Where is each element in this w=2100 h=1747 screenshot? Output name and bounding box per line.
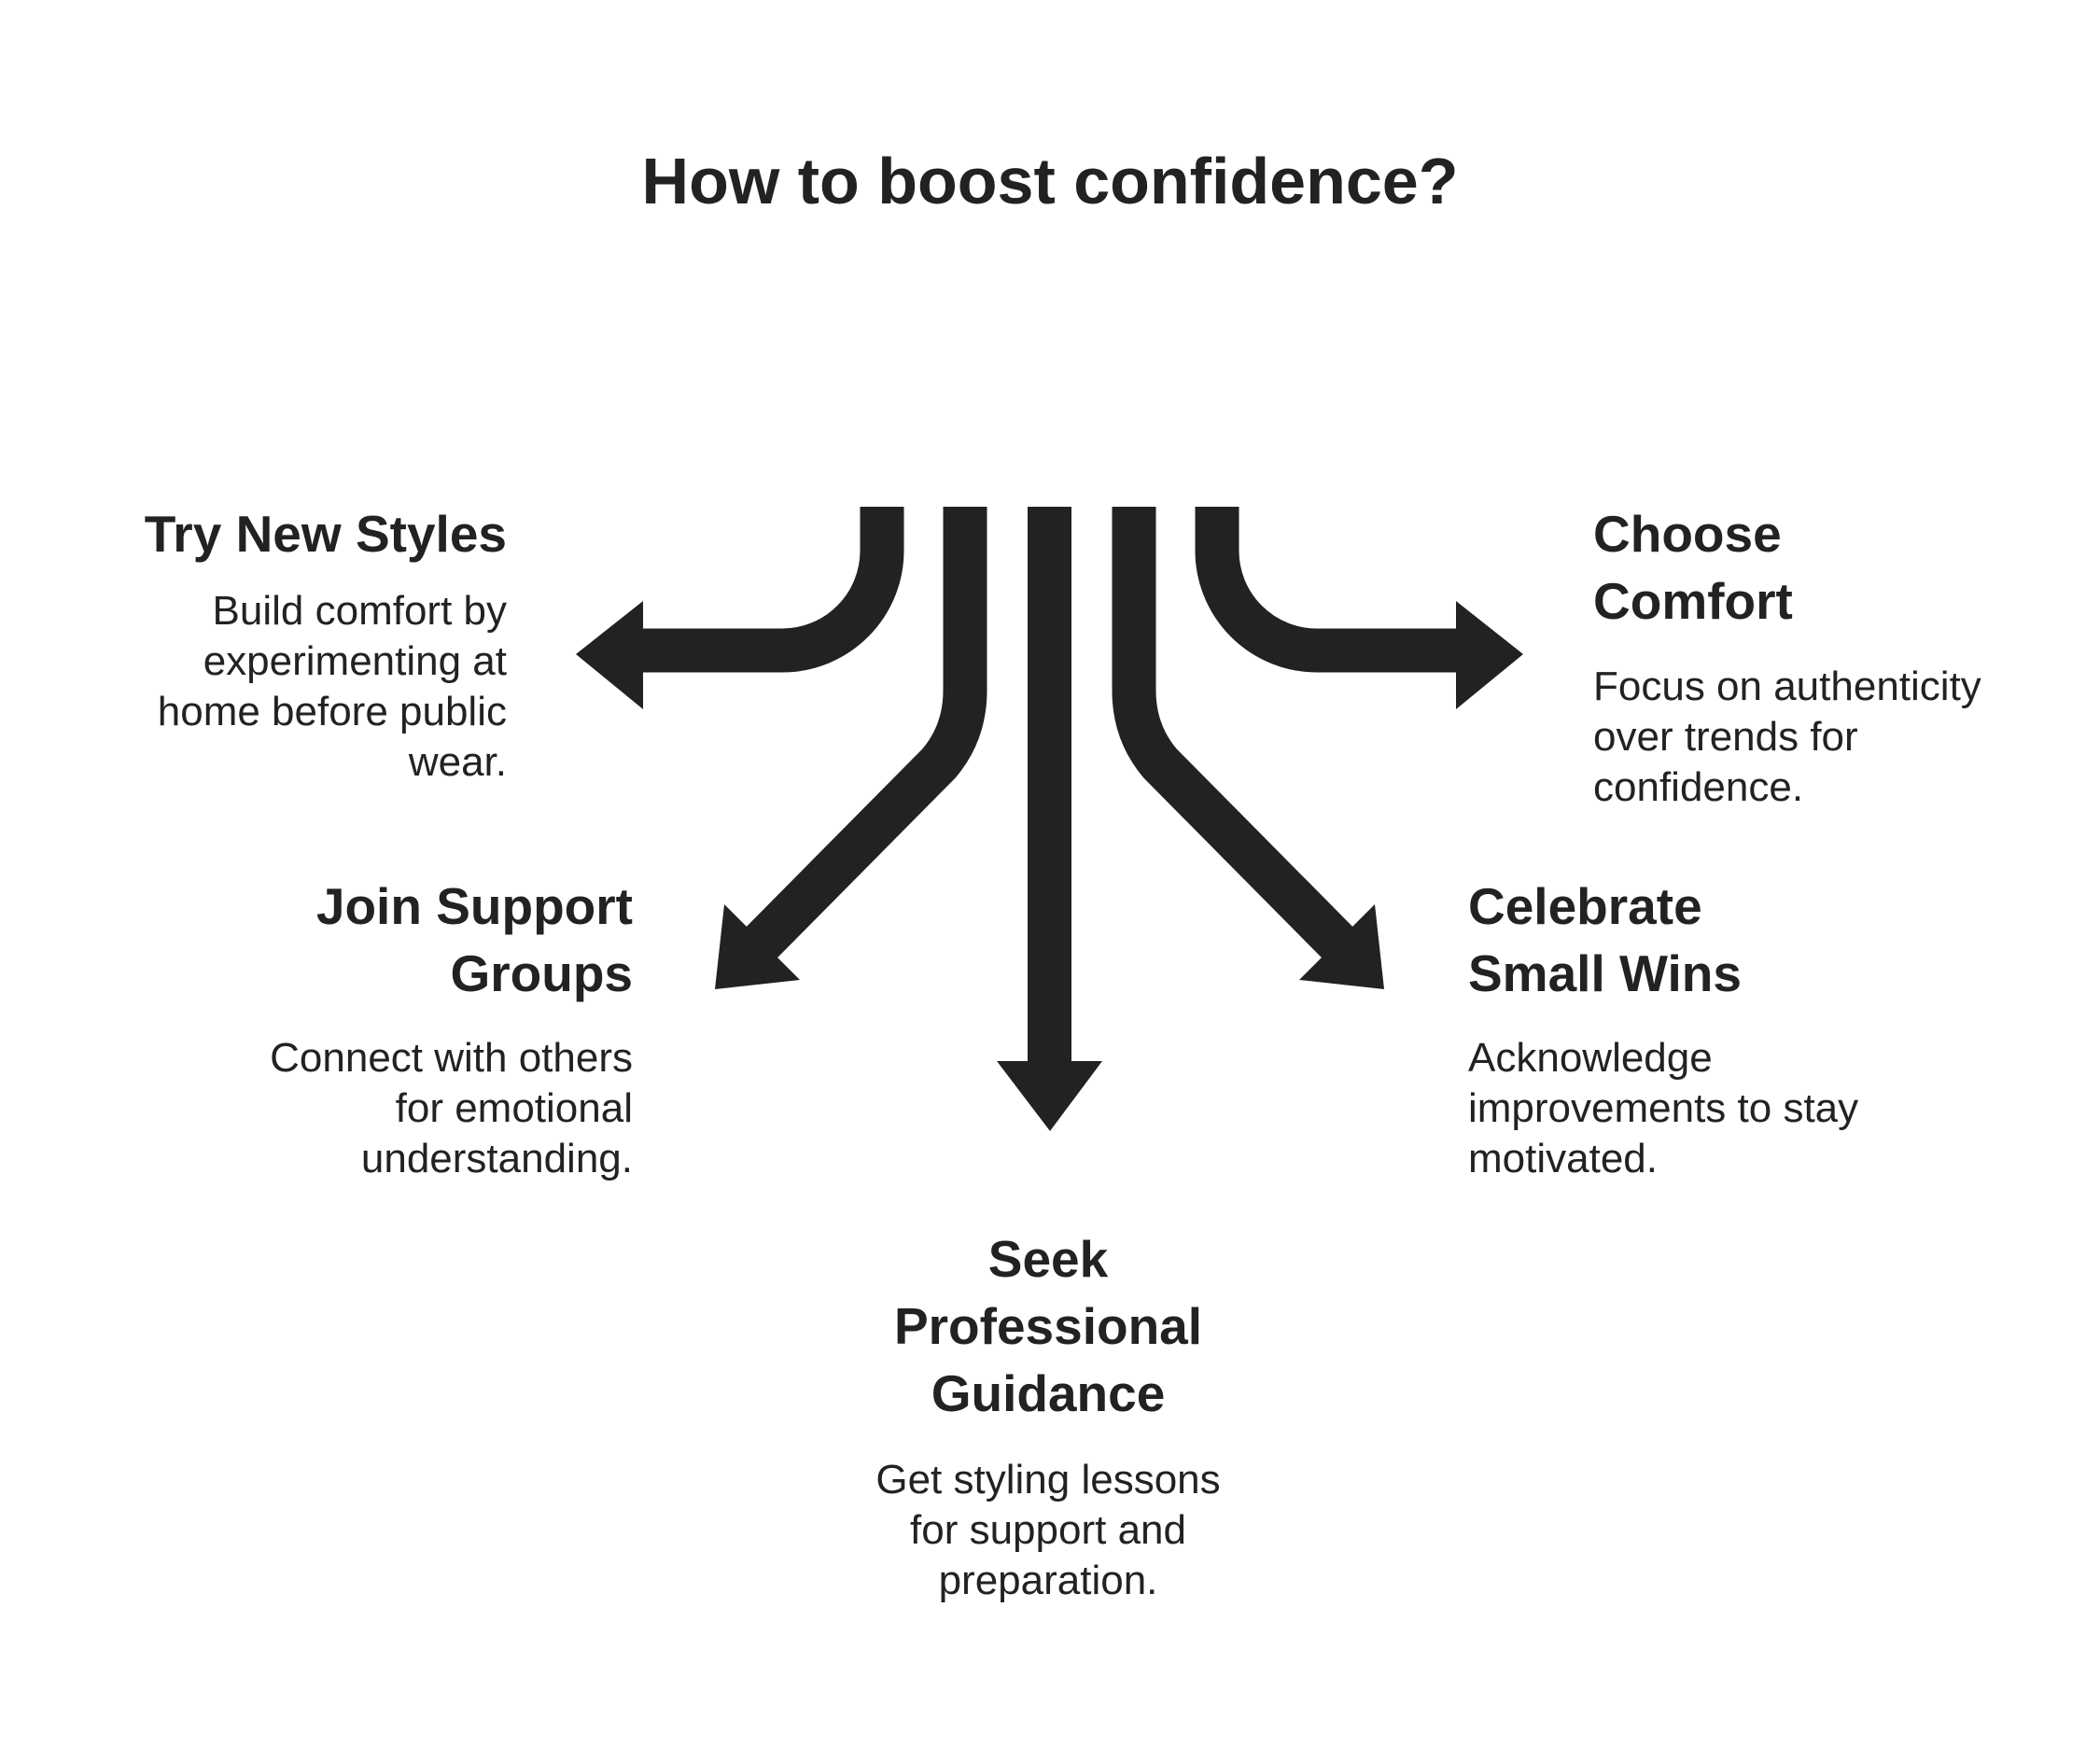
text: motivated.: [1468, 1136, 1658, 1181]
heading: [894, 1230, 1202, 1422]
text: [158, 588, 507, 785]
heading: Comfort: [1593, 572, 1793, 630]
text: [875, 1457, 1221, 1603]
text: home before public: [158, 689, 507, 734]
heading: Try New Styles: [145, 505, 507, 563]
text: Focus on authenticity: [1593, 664, 1981, 709]
panel: try new styles: [145, 505, 507, 785]
arrow: celebrate small wins: [1134, 507, 1384, 989]
text: understanding.: [361, 1136, 633, 1181]
heading: Guidance: [931, 1364, 1165, 1422]
text: [1593, 664, 1981, 810]
heading: Join Support: [316, 877, 633, 935]
heading: Small Wins: [1468, 944, 1742, 1002]
text: [270, 1035, 633, 1181]
heading: Professional: [894, 1297, 1202, 1355]
text: Get styling lessons: [875, 1457, 1221, 1502]
title: How to boost confidence?: [642, 145, 1458, 217]
heading: Seek: [988, 1230, 1108, 1288]
text: improvements to stay: [1468, 1085, 1858, 1131]
text: for support and: [910, 1507, 1186, 1553]
heading: [1468, 877, 1742, 1002]
arrow: join support groups: [715, 507, 965, 989]
text: preparation.: [939, 1558, 1157, 1603]
arrow: try new styles: [576, 507, 882, 709]
text: Acknowledge: [1468, 1035, 1713, 1081]
text: Connect with others: [270, 1035, 633, 1081]
heading: [316, 877, 633, 1002]
heading: Groups: [450, 944, 633, 1002]
panel: seek professional guidance: [875, 1230, 1221, 1603]
text: over trends for: [1593, 714, 1858, 760]
panel: celebrate small wins: [1468, 877, 1858, 1181]
arrow: seek professional guidance: [997, 507, 1102, 1131]
panel: choose comfort: [1593, 505, 1981, 810]
panel: join support groups: [270, 877, 633, 1181]
heading: Celebrate: [1468, 877, 1702, 935]
heading: [1593, 505, 1793, 630]
text: Build comfort by: [213, 588, 507, 634]
text: [1468, 1035, 1858, 1181]
arrow: choose comfort: [1217, 507, 1523, 709]
heading: Choose: [1593, 505, 1782, 563]
text: wear.: [409, 739, 507, 785]
text: for emotional: [396, 1085, 633, 1131]
text: confidence.: [1593, 764, 1803, 810]
text: experimenting at: [203, 638, 507, 684]
